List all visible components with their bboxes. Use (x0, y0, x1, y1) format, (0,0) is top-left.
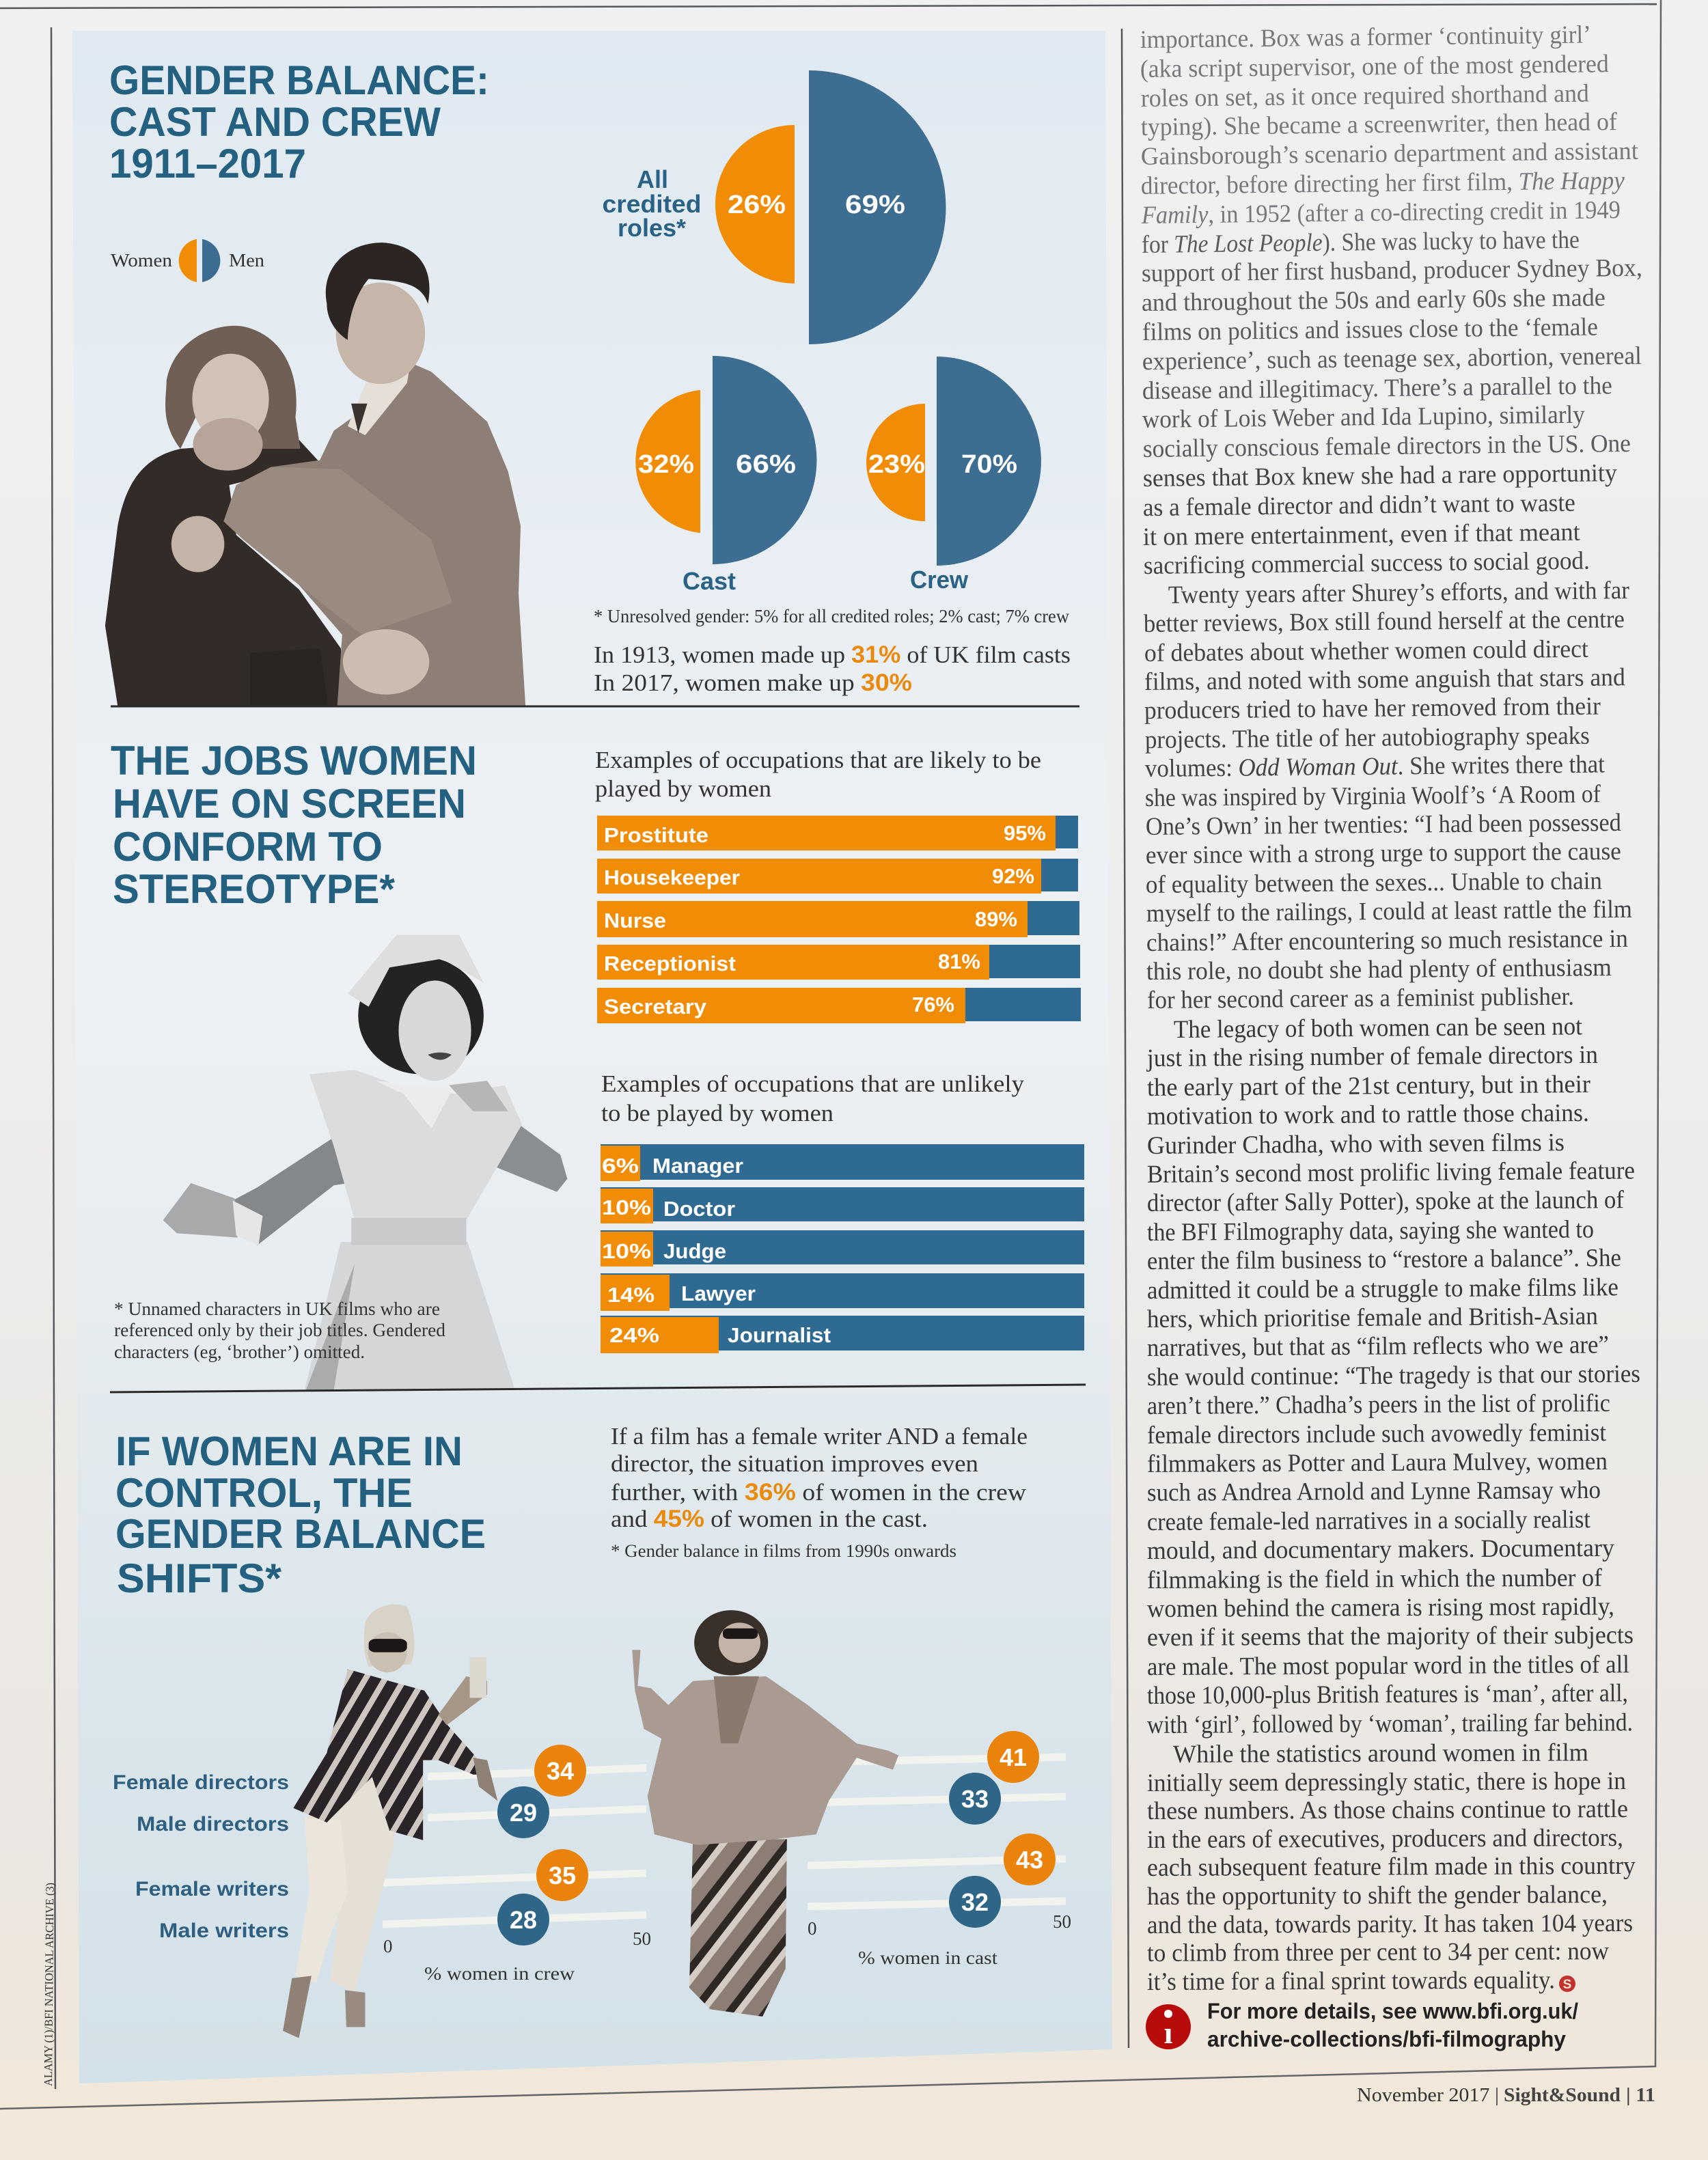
bar: judge: 10% (602, 1239, 651, 1263)
bar: housekeeper: 92% (992, 864, 1034, 888)
bar: receptionist: Receptionist (604, 952, 736, 975)
heading: women in control: CONTROL, THE (115, 1470, 413, 1516)
data points: women in crew (497, 1745, 588, 1946)
bar: journalist: Journalist (728, 1323, 831, 1347)
axis labels: crew: % women in crew (424, 1963, 575, 1984)
bar: doctor: Doctor (663, 1197, 735, 1221)
chart: cast pie (635, 356, 816, 595)
bar: secretary: Secretary (604, 995, 707, 1019)
paragraph: Twenty years after: myself to the railings, I could at least rattle the film (1146, 896, 1632, 928)
footnote: unresolved gender: * Unresolved gender: 5% for all credited roles; 2% cast; 7% crew (594, 606, 1069, 626)
axis labels: crew (383, 1928, 651, 1984)
text block: unlikely occupations intro: to be played by women (601, 1100, 834, 1126)
paragraph: legacy of both women: create female-led narratives in a socially realist (1147, 1506, 1591, 1536)
paragraph: legacy of both women: the BFI Filmography data, saying she wanted to (1147, 1215, 1594, 1247)
paragraph: legacy of both women: filmmakers as Potter and Laura Mulvey, women (1147, 1448, 1608, 1478)
paragraph: Box biography: sacrificing commercial success to social good. (1144, 547, 1590, 580)
chart: cast pie: 32% (638, 450, 694, 479)
footer: issue and page number: Sight&Sound (1504, 2085, 1621, 2106)
point: male directors 33 (949, 1773, 1001, 1825)
chart: crew pie (866, 357, 1041, 594)
paragraph: Twenty years after: of debates about whether women could direct (1144, 635, 1589, 667)
paragraph: Box biography: work of Lois Weber and Ida Lupino, similarly (1142, 401, 1586, 434)
bar: receptionist (597, 945, 1080, 980)
paragraph: legacy of both women: female directors include such avowedly feminist (1147, 1419, 1607, 1450)
icon: end mark S: S (1563, 1978, 1571, 1992)
paragraph: final sprint: and the data, towards parity. It has taken 104 years (1147, 1909, 1633, 1939)
paragraph: Box biography: Family, in 1952 (after a co-directing credit in 1949 (1141, 196, 1621, 230)
footnote: unnamed characters: characters (eg, ‘brother’) omitted. (114, 1342, 365, 1362)
icon: information: ı (1164, 2015, 1173, 2050)
bar: nurse (597, 901, 1079, 937)
point: female directors 34 (534, 1745, 586, 1797)
text block: female writer and director: If a film has a female writer AND a female (611, 1423, 1028, 1450)
paragraph: Twenty years after: films, and noted with some anguish that stars and (1144, 663, 1626, 696)
bar: prostitute (597, 816, 1078, 850)
paragraph: Box biography: disease and illegitimacy. There’s a parallel to the (1142, 372, 1612, 405)
icon: end mark S (1559, 1976, 1575, 1992)
paragraph: Box biography: (aka script supervisor, one of the most gendered (1140, 50, 1610, 83)
text block: 1913 and 2017 comparison (594, 641, 1071, 696)
footer: issue and page number (1357, 2085, 1655, 2106)
photo: woman in kaftan (632, 1610, 898, 2017)
footnote: unnamed characters (114, 1299, 446, 1362)
bar: receptionist: 81% (938, 950, 980, 973)
bar: lawyer: 14% (607, 1283, 655, 1307)
paragraph: legacy of both women: Gurinder Chadha, who with seven films is (1147, 1129, 1565, 1160)
heading: jobs on screen: THE JOBS WOMEN (111, 738, 477, 784)
paragraph: legacy of both women: even if it seems that the majority of their subjects (1147, 1621, 1634, 1652)
footnote: unnamed characters: referenced only by their job titles. Gendered (114, 1320, 446, 1340)
paragraph: legacy of both women: filmmaking is the field in which the number of (1147, 1564, 1603, 1594)
data points: women in cast (949, 1731, 1056, 1928)
bar: doctor: 10% (602, 1195, 651, 1219)
paragraph: Twenty years after (1144, 577, 1632, 1014)
paragraph: Box biography: importance. Box was a former ‘continuity girl’ (1140, 21, 1591, 54)
paragraph: legacy of both women: The legacy of both women can be seen not (1174, 1012, 1583, 1044)
text block: more details link (1207, 1999, 1578, 2051)
point: female writers 43: 43 (1016, 1846, 1043, 1874)
heading: jobs on screen: HAVE ON SCREEN (113, 781, 466, 827)
text block: unlikely occupations intro (601, 1070, 1025, 1126)
text block: 1913 and 2017 comparison: In 1913, women made up 31% of UK film casts (594, 641, 1071, 668)
paragraph: Twenty years after: volumes: Odd Woman Out. She writes there that (1145, 751, 1606, 783)
paragraph: legacy of both women: the early part of the 21st century, but in their (1147, 1070, 1590, 1102)
paragraph: Twenty years after: Twenty years after Shurey’s efforts, and with far (1168, 577, 1629, 609)
point: male writers 32 (949, 1876, 1001, 1928)
text block: likely occupations intro (595, 747, 1041, 802)
paragraph: legacy of both women: such as Andrea Arnold and Lynne Ramsay who (1147, 1476, 1601, 1507)
paragraph: Box biography: and throughout the 50s and early 60s she made (1142, 283, 1606, 317)
label: all credited roles: roles* (618, 214, 686, 242)
chart labels: crew and writer categories: Female writers (135, 1878, 289, 1900)
bar: lawyer (601, 1273, 1084, 1311)
text block: female writer and director: director, the situation improves even (611, 1450, 978, 1477)
label: all credited roles (603, 165, 701, 242)
photo credit: ALAMY (1)/BFI NATIONAL ARCHIVE (3) (42, 1883, 57, 2086)
heading: women in control (115, 1428, 486, 1601)
paragraph: final sprint: each subsequent feature film made in this country (1147, 1852, 1636, 1882)
paragraph: Twenty years after: this role, no doubt she had plenty of enthusiasm (1146, 954, 1612, 986)
bar: lawyer: Lawyer (681, 1282, 756, 1305)
footer: issue and page number: | 11 (1626, 2085, 1655, 2106)
chart: all credited roles pie (603, 70, 946, 344)
axis labels: cast: 0 (808, 1918, 817, 1939)
bar: secretary (597, 988, 1081, 1023)
paragraph: final sprint: it’s time for a final sprint towards equality. (1147, 1966, 1555, 1996)
bar: manager (601, 1144, 1084, 1181)
paragraph: Box biography: roles on set, as it once required shorthand and (1141, 80, 1590, 113)
axis labels: cast: 50 (1053, 1911, 1071, 1932)
paragraph: legacy of both women: enter the film business to “restore a balance”. She (1147, 1244, 1621, 1275)
panel: infographic background (72, 31, 1112, 2083)
paragraph: Box biography: support of her first husband, producer Sydney Box, (1142, 254, 1642, 288)
paragraph: final sprint: to climb from three per cent to 34 per cent: now (1147, 1937, 1609, 1967)
paragraph: Box biography: experience’, such as teenage sex, abortion, venereal (1142, 342, 1642, 376)
point: male directors 29: 29 (510, 1799, 537, 1827)
paragraph: final sprint (1147, 1739, 1636, 1996)
footer: issue and page number: November 2017 | (1357, 2085, 1499, 2106)
paragraph: Box biography: senses that Box knew she had a rare opportunity (1143, 459, 1618, 493)
photo: nurse (163, 934, 567, 1390)
article body text (1140, 21, 1642, 1996)
chart: cast pie: 66% (736, 450, 796, 479)
paragraph: Box biography: socially conscious female directors in the US. One (1143, 430, 1631, 463)
paragraph: final sprint: has the opportunity to shift the gender balance, (1147, 1881, 1608, 1911)
paragraph: legacy of both women: she would continue: “The tragedy is that our stories (1147, 1360, 1640, 1391)
paragraph: legacy of both women: just in the rising number of female directors in (1146, 1041, 1598, 1072)
bar: prostitute: Prostitute (604, 823, 708, 847)
text block: more details link: archive-collections/bfi-filmography (1207, 2027, 1566, 2051)
paragraph: Box biography: Gainsborough’s scenario department and assistant (1141, 137, 1639, 171)
bar: housekeeper (597, 859, 1078, 894)
text block: female writer and director: and 45% of women in the cast. (611, 1506, 928, 1532)
paragraph: Box biography: as a female director and didn’t want to waste (1143, 489, 1575, 522)
heading: women in control: IF WOMEN ARE IN (115, 1428, 463, 1474)
bar: doctor (601, 1187, 1084, 1223)
paragraph: Twenty years after: projects. The title of her autobiography speaks (1145, 722, 1590, 754)
chart grid lines: cast (808, 1757, 1066, 1907)
chart labels: crew and writer categories: Male writers (159, 1920, 289, 1942)
paragraph: Twenty years after: better reviews, Box still found herself at the centre (1144, 605, 1625, 638)
paragraph: legacy of both women: Britain’s second most prolific living female feature (1147, 1157, 1635, 1189)
point: female writers 35 (536, 1849, 588, 1901)
axis labels: cast (808, 1911, 1071, 1968)
paragraph: final sprint: initially seem depressingly static, there is hope in (1147, 1767, 1626, 1797)
point: male directors 33: 33 (961, 1785, 989, 1813)
point: female writers 43 (1004, 1833, 1056, 1885)
bar chart: occupations likely to be played by women (597, 816, 1081, 1023)
heading: women in control: SHIFTS* (117, 1555, 282, 1601)
paragraph: legacy of both women: with ‘girl’, followed by ‘woman’, trailing far behind. (1147, 1708, 1633, 1739)
heading: gender balance (109, 57, 489, 186)
paragraph: Twenty years after: One’s Own’ in her twenties: “I had been possessed (1146, 809, 1622, 841)
paragraph: Twenty years after: chains!” After encountering so much resistance in (1146, 925, 1628, 957)
paragraph: Box biography (1140, 21, 1642, 580)
paragraph: Box biography: director, before directing her first film, The Happy (1141, 167, 1625, 200)
text block: likely occupations intro: played by women (595, 775, 771, 802)
paragraph: legacy of both women: those 10,000-plus British features is ‘man’, after all, (1147, 1679, 1628, 1710)
bar: judge: Judge (663, 1239, 726, 1263)
photo: man and woman, frightened (105, 243, 525, 706)
bar: manager: 6% (602, 1154, 639, 1178)
bar: prostitute: 95% (1004, 821, 1046, 845)
paragraph: legacy of both women (1146, 1012, 1640, 1739)
chart: cast pie: Cast (683, 567, 736, 595)
paragraph: Twenty years after: of equality between the sexes... Unable to chain (1146, 867, 1602, 899)
legend: women and men: Men (229, 250, 265, 271)
axis labels: crew: 0 (383, 1936, 392, 1956)
bar: secretary: 76% (912, 993, 954, 1016)
legend: women and men (111, 239, 265, 282)
paragraph: final sprint: While the statistics around women in film (1173, 1739, 1588, 1769)
paragraph: legacy of both women: mould, and documentary makers. Documentary (1147, 1534, 1615, 1565)
heading: gender balance: GENDER BALANCE: (109, 57, 489, 103)
paragraph: legacy of both women: women behind the camera is rising most rapidly, (1147, 1592, 1614, 1623)
bar: nurse: Nurse (604, 909, 666, 932)
paragraph: Twenty years after: producers tried to have her removed from their (1144, 693, 1601, 725)
chart labels: crew and writer categories (113, 1771, 289, 1942)
paragraph: Box biography: films on politics and issues close to the ‘female (1142, 313, 1598, 346)
point: male directors 29 (497, 1786, 549, 1838)
paragraph: Twenty years after: for her second career as a feminist publisher. (1147, 983, 1574, 1014)
bar: manager: Manager (652, 1154, 743, 1178)
paragraph: final sprint: these numbers. As those chains continue to rattle (1147, 1795, 1628, 1825)
text block: more details link: For more details, see www.bfi.org.uk/ (1207, 1999, 1578, 2023)
heading: gender balance: CAST AND CREW (109, 99, 441, 145)
icon: information (1146, 2004, 1191, 2050)
bar: housekeeper: Housekeeper (604, 866, 740, 889)
footnote: gender balance in films: * Gender balance in films from 1990s onwards (611, 1541, 956, 1561)
chart labels: crew and writer categories: Female directors (113, 1771, 289, 1794)
bar: journalist (601, 1316, 1084, 1353)
heading: jobs on screen: CONFORM TO (113, 824, 383, 870)
paragraph: Box biography: typing). She became a screenwriter, then head of (1141, 108, 1618, 141)
point: male writers 32: 32 (961, 1888, 989, 1916)
label: all credited roles: credited (603, 190, 701, 218)
paragraph: legacy of both women: admitted it could be a struggle to make films like (1147, 1273, 1619, 1305)
photo: woman in striped jacket (283, 1605, 497, 2038)
chart: crew pie: 70% (961, 450, 1017, 479)
chart: all credited roles pie: 69% (845, 191, 905, 219)
axis labels: crew: 50 (633, 1928, 651, 1949)
chart grid lines: crew (383, 1768, 646, 1924)
chart: crew pie: 23% (868, 450, 925, 479)
point: female writers 35: 35 (549, 1861, 576, 1889)
point: female directors 41: 41 (1000, 1743, 1027, 1771)
heading: jobs on screen: STEREOTYPE* (113, 866, 396, 912)
bar: nurse: 89% (975, 907, 1017, 931)
text block: likely occupations intro: Examples of occupations that are likely to be (595, 747, 1041, 773)
footnote: unnamed characters: * Unnamed characters in UK films who are (114, 1299, 440, 1319)
paragraph: Box biography: for The Lost People). She was lucky to have the (1142, 226, 1580, 259)
text block: 1913 and 2017 comparison: In 2017, women make up 30% (594, 669, 912, 696)
bar: judge (601, 1230, 1084, 1266)
bar: journalist: 24% (609, 1323, 659, 1347)
paragraph: Twenty years after: ever since with a strong urge to support the cause (1146, 837, 1621, 870)
paragraph: Twenty years after: she was inspired by Virginia Woolf’s ‘A Room of (1145, 780, 1601, 812)
point: female directors 41 (987, 1731, 1039, 1783)
paragraph: legacy of both women: are male. The most popular word in the titles of all (1147, 1650, 1629, 1681)
point: male writers 28: 28 (510, 1906, 537, 1934)
paragraph: Box biography: it on mere entertainment, even if that meant (1143, 518, 1581, 551)
paragraph: final sprint: in the ears of executives, producers and directors, (1147, 1824, 1623, 1854)
heading: jobs on screen (111, 738, 477, 912)
paragraph: legacy of both women: motivation to work and to rattle those chains. (1147, 1099, 1589, 1131)
paragraph: legacy of both women: hers, which prioritise female and British-Asian (1147, 1302, 1598, 1333)
paragraph: legacy of both women: director (after Sally Potter), spoke at the launch of (1147, 1186, 1625, 1217)
chart labels: crew and writer categories: Male directors (137, 1813, 289, 1836)
chart: all credited roles pie: 26% (728, 191, 786, 219)
paragraph: legacy of both women: aren’t there.” Chadha’s peers in the list of prolific (1147, 1389, 1610, 1420)
bar chart: occupations unlikely to be played by women (601, 1144, 1084, 1353)
point: male writers 28 (497, 1894, 549, 1946)
label: all credited roles: All (637, 165, 668, 193)
heading: women in control: GENDER BALANCE (115, 1511, 486, 1557)
section dividers (110, 706, 1086, 1392)
text block: female writer and director: further, with 36% of women in the crew (611, 1479, 1027, 1506)
axis labels: cast: % women in cast (858, 1948, 998, 1968)
chart: crew pie: Crew (910, 566, 969, 594)
paragraph: legacy of both women: narratives, but that as “film reflects who we are” (1147, 1331, 1609, 1362)
heading: gender balance: 1911–2017 (109, 141, 306, 186)
text block: unlikely occupations intro: Examples of occupations that are unlikely (601, 1070, 1025, 1097)
point: female directors 34: 34 (547, 1757, 574, 1785)
text block: female writer and director (611, 1423, 1028, 1532)
legend: women and men: Women (111, 250, 173, 271)
